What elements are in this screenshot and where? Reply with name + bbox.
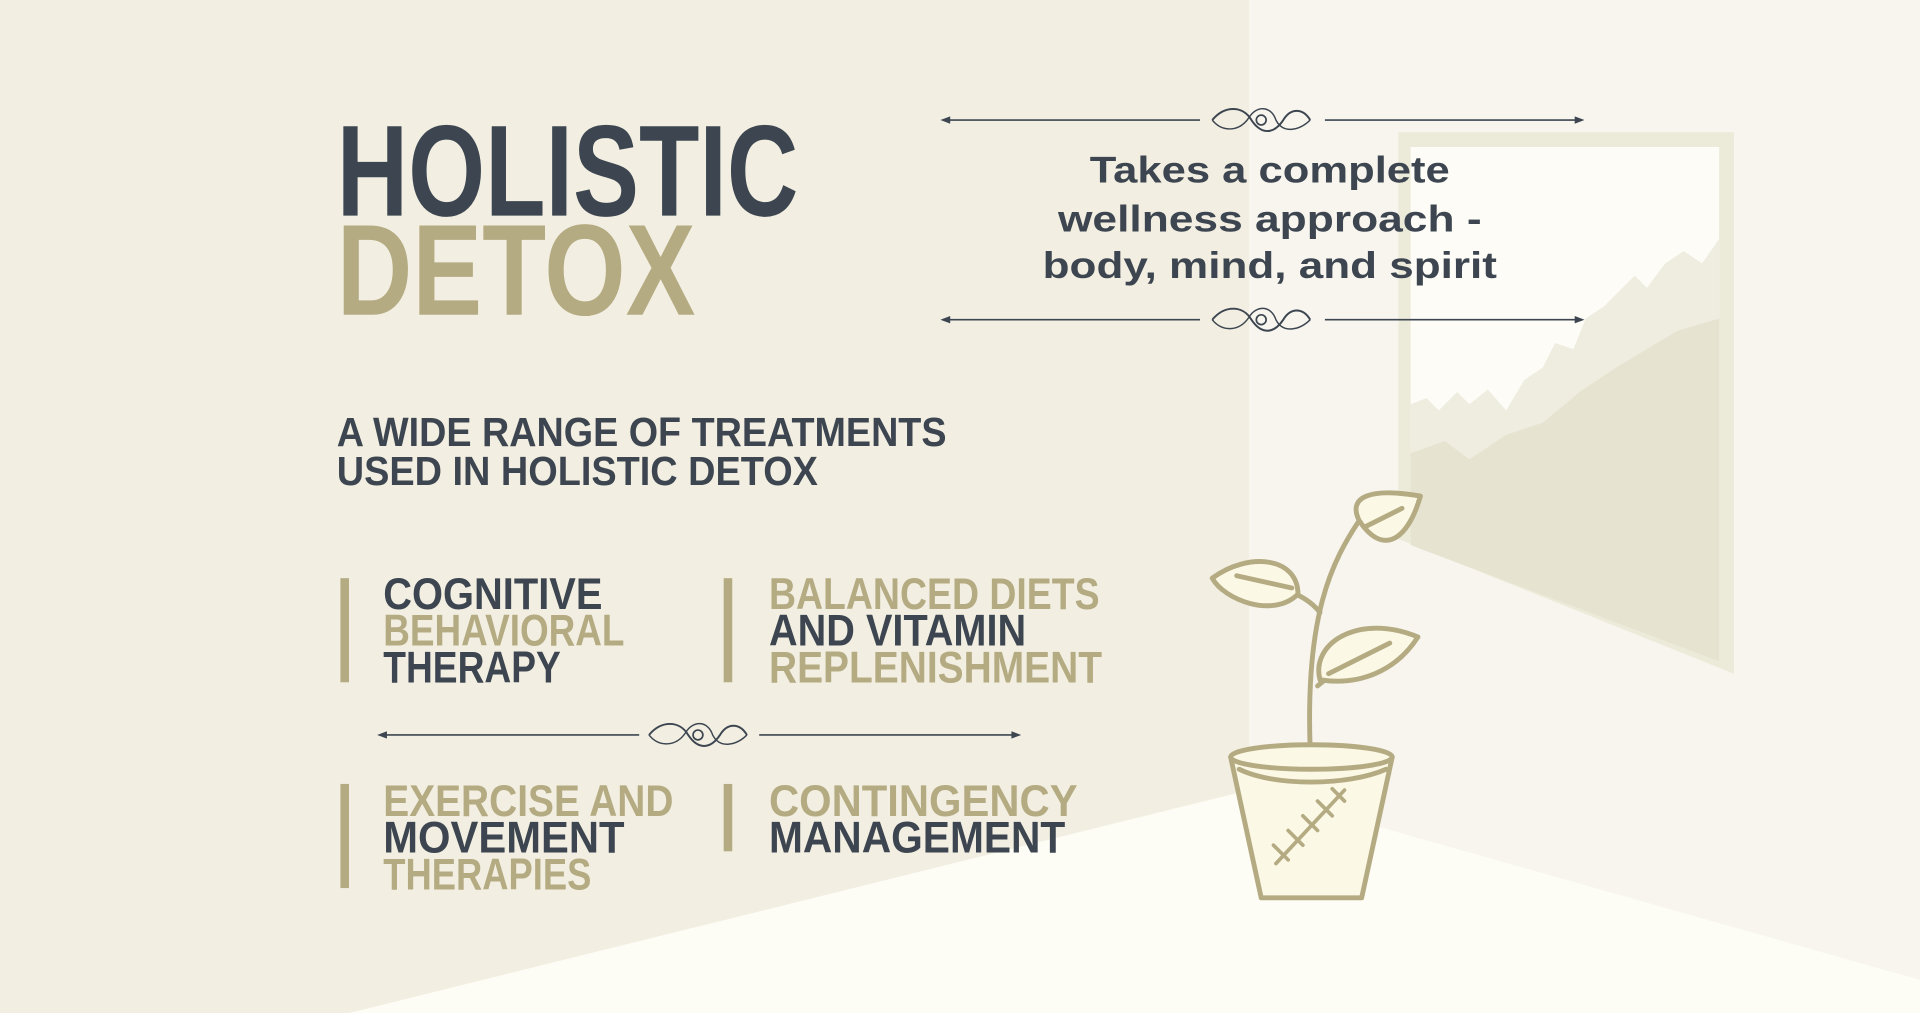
subtitle: USED IN HOLISTIC DETOX	[337, 448, 818, 494]
item: exercise: THERAPIES	[383, 850, 591, 899]
tagline with arrows: body, mind, and spirit	[1043, 245, 1497, 286]
item: cognitive behavioral therapy: BEHAVIORAL	[383, 607, 624, 656]
tagline with arrows: wellness approach -	[1057, 199, 1482, 240]
item: cognitive behavioral therapy: COGNITIVE	[383, 570, 602, 619]
subtitle	[337, 409, 947, 494]
title: HOLISTIC	[337, 98, 798, 244]
item: balanced diets: AND VITAMIN	[769, 607, 1026, 656]
item: balanced diets	[724, 570, 1102, 692]
icon: potted plant	[1212, 493, 1420, 898]
title	[337, 98, 798, 343]
item: exercise: EXERCISE AND	[383, 777, 673, 826]
item: contingency management: CONTINGENCY	[769, 777, 1078, 826]
item: contingency management	[724, 777, 1078, 863]
tagline with arrows	[940, 109, 1584, 331]
item: exercise: MOVEMENT	[383, 814, 625, 863]
window with forest	[1398, 132, 1734, 674]
tagline with arrows: Takes a complete	[1090, 150, 1450, 191]
item: exercise	[340, 777, 673, 899]
item: contingency management: MANAGEMENT	[769, 814, 1065, 863]
item: cognitive behavioral therapy: THERAPY	[383, 643, 561, 692]
item: cognitive behavioral therapy	[340, 570, 624, 692]
subtitle: A WIDE RANGE OF TREATMENTS	[337, 409, 947, 455]
item: balanced diets: BALANCED DIETS	[769, 570, 1100, 619]
title: DETOX	[337, 197, 696, 343]
divider arrow	[377, 724, 1021, 746]
item: balanced diets: REPLENISHMENT	[769, 643, 1102, 692]
